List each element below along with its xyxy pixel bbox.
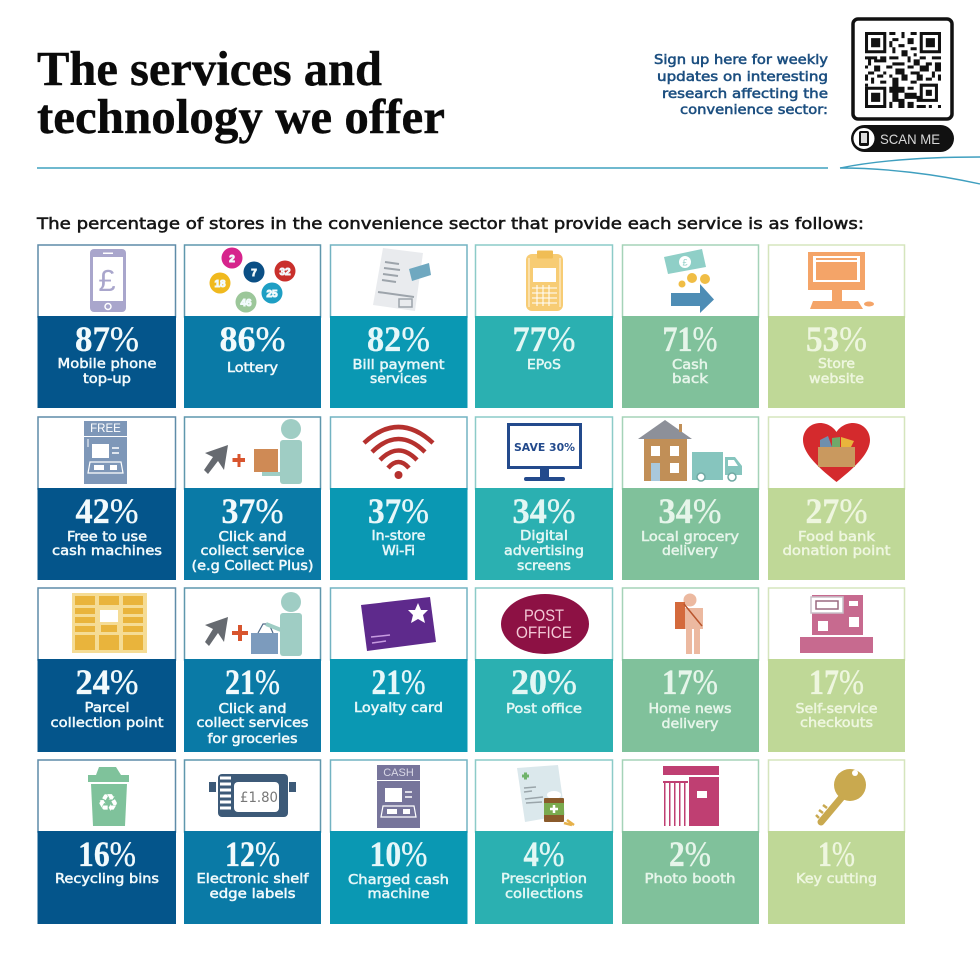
icon: post office sign xyxy=(501,594,589,654)
card: cash back xyxy=(622,245,759,408)
title: The services and xyxy=(37,41,382,96)
label: Mobile phone xyxy=(58,357,156,372)
label xyxy=(196,872,309,902)
label xyxy=(672,358,709,387)
label xyxy=(504,529,584,574)
icon: cash ATM xyxy=(377,765,420,828)
card: bill payment xyxy=(330,245,468,408)
value: 82% xyxy=(367,319,430,359)
card: click and collect groceries xyxy=(184,588,321,752)
label: advertising xyxy=(504,544,584,559)
icon: cash back: £ xyxy=(682,258,688,268)
value: 17% xyxy=(662,662,718,702)
label: edge labels xyxy=(210,887,296,902)
value: 77% xyxy=(512,319,576,359)
icon: key xyxy=(816,769,866,822)
label: Bill payment xyxy=(352,358,444,373)
value: 1% xyxy=(818,834,855,874)
icon: post office sign: OFFICE xyxy=(516,623,572,642)
label: Store xyxy=(818,357,855,372)
icon: monitor xyxy=(508,424,580,481)
swoosh xyxy=(840,157,980,184)
icon: house and van xyxy=(638,420,742,481)
card: home news delivery xyxy=(622,588,759,752)
card: post office xyxy=(475,588,613,752)
label: Click and xyxy=(218,530,286,545)
label: donation point xyxy=(782,544,890,559)
card: lottery xyxy=(184,245,321,408)
label: Wi-Fi xyxy=(382,544,415,559)
label: (e.g Collect Plus) xyxy=(192,559,314,574)
icon: news delivery person xyxy=(675,594,703,654)
card: charged cash machine xyxy=(330,760,468,924)
label: delivery xyxy=(662,717,719,732)
value: 27% xyxy=(806,491,868,531)
title xyxy=(37,41,445,144)
label: Click and xyxy=(218,702,286,717)
icon: free ATM: FREE xyxy=(90,423,121,435)
label xyxy=(782,530,890,559)
label xyxy=(52,530,162,559)
icon: loyalty card xyxy=(361,597,436,651)
icon: click and collect bag xyxy=(205,592,302,656)
label: Electronic shelf xyxy=(196,872,309,887)
label xyxy=(809,357,864,387)
card: key cutting xyxy=(768,760,905,924)
value: 53% xyxy=(806,319,867,359)
card: food bank xyxy=(768,417,905,580)
value: 17% xyxy=(809,662,864,702)
icon: computer xyxy=(808,252,874,309)
label: top-up xyxy=(83,372,131,387)
value: 21% xyxy=(225,662,280,702)
icon: lottery balls: 2 xyxy=(229,254,235,265)
icon: lottery balls: 7 xyxy=(251,268,257,279)
icon: lottery balls: 25 xyxy=(266,289,278,300)
label: Lottery xyxy=(227,361,278,376)
sign up text xyxy=(654,53,828,118)
label: Home news xyxy=(648,702,732,717)
label xyxy=(50,701,164,731)
sign up text: updates on interesting xyxy=(657,70,828,85)
label: Prescription xyxy=(501,872,587,887)
icon: prescription xyxy=(517,765,574,825)
QR code xyxy=(853,19,952,119)
label: Local grocery xyxy=(641,530,739,545)
card: mobile phone top-up xyxy=(38,245,176,408)
value: 37% xyxy=(222,491,284,531)
card: digital advertising xyxy=(475,417,613,580)
header rule xyxy=(37,167,828,169)
label: Recycling bins xyxy=(55,872,159,887)
card: EPoS xyxy=(475,245,613,408)
label: Key cutting xyxy=(796,872,877,887)
card: photo booth xyxy=(622,760,759,924)
card: wi-fi xyxy=(330,417,468,580)
card: store website xyxy=(768,245,905,408)
icon: lottery balls: 46 xyxy=(240,298,252,309)
label: services xyxy=(370,372,427,387)
card: free cash machines xyxy=(38,417,176,580)
icon: shelf label xyxy=(209,774,296,817)
value: 37% xyxy=(368,491,429,531)
icon: phone xyxy=(90,249,126,312)
label xyxy=(648,702,732,732)
icon: shelf label: £1.80 xyxy=(240,790,278,806)
value: 2% xyxy=(669,834,711,874)
label: Charged cash xyxy=(348,873,449,888)
card: prescription collections xyxy=(475,760,613,924)
icon: recycling bin: ♻ xyxy=(97,789,119,817)
label: back xyxy=(672,372,709,387)
value: 34% xyxy=(658,491,722,531)
icon: recycling bin xyxy=(88,767,129,826)
card: loyalty card xyxy=(330,588,468,752)
icon: self checkout xyxy=(800,595,873,653)
label: Food bank xyxy=(798,530,876,545)
label: collections xyxy=(505,887,583,902)
card: local grocery delivery xyxy=(622,417,759,580)
value: 12% xyxy=(225,834,280,874)
label: Photo booth xyxy=(644,872,736,887)
label: collection point xyxy=(50,716,164,731)
label xyxy=(372,529,426,559)
label xyxy=(796,702,878,731)
label xyxy=(196,702,309,747)
icon: photo booth xyxy=(663,766,719,826)
card: electronic shelf labels xyxy=(184,760,321,924)
card: click and collect xyxy=(184,417,321,580)
value: 87% xyxy=(75,319,139,359)
label: checkouts xyxy=(800,716,873,731)
label: EPoS xyxy=(527,358,561,373)
subtitle: The percentage of stores in the convenience sector that provide each service is as follows: xyxy=(36,214,864,233)
value: 16% xyxy=(78,834,136,874)
sign up text: Sign up here for weekly xyxy=(654,53,828,68)
value: 24% xyxy=(76,662,138,702)
icon: parcel lockers xyxy=(72,593,147,653)
label: Loyalty card xyxy=(354,701,443,716)
scan me badge: SCAN ME xyxy=(880,131,940,147)
label xyxy=(348,873,449,902)
icon: phone: £ xyxy=(98,263,116,298)
label: collect service xyxy=(200,544,304,559)
title: technology we offer xyxy=(37,89,445,144)
icon: card terminal xyxy=(526,250,563,311)
icon: click and collect parcel xyxy=(204,419,302,484)
label: for groceries xyxy=(208,732,298,747)
label: delivery xyxy=(662,544,718,559)
value: 71% xyxy=(662,319,718,359)
value: 42% xyxy=(76,491,138,531)
value: 86% xyxy=(220,319,286,359)
sign up text: research affecting the xyxy=(662,87,828,102)
label: collect services xyxy=(196,716,309,731)
icon: lottery balls: 32 xyxy=(279,267,291,278)
label: screens xyxy=(517,559,571,574)
icon: lottery balls xyxy=(210,248,296,312)
value: 4% xyxy=(524,834,564,874)
label: Free to use xyxy=(67,530,147,545)
icon: cash ATM: CASH xyxy=(383,767,414,779)
icon: lottery balls: 18 xyxy=(214,279,226,290)
label: Post office xyxy=(506,702,582,717)
label: Cash xyxy=(672,358,708,373)
label xyxy=(501,872,587,902)
value: 10% xyxy=(370,834,428,874)
label: machine xyxy=(368,887,430,902)
value: 34% xyxy=(512,491,576,531)
scan me badge xyxy=(851,125,954,152)
value: 20% xyxy=(511,662,577,702)
card: parcel collection xyxy=(38,588,176,752)
label: Parcel xyxy=(84,701,130,716)
icon: post office sign: POST xyxy=(524,606,564,625)
label xyxy=(192,530,314,574)
label xyxy=(58,357,156,387)
card: self-service checkouts xyxy=(768,588,905,752)
label: cash machines xyxy=(52,544,162,559)
label: website xyxy=(809,372,864,387)
icon: free ATM xyxy=(84,421,127,484)
icon: cash back xyxy=(664,249,714,313)
label: In-store xyxy=(372,529,426,544)
icon: bill xyxy=(373,248,431,311)
icon: monitor: SAVE 30% xyxy=(514,441,575,454)
value: 21% xyxy=(372,662,426,702)
icon: heart with food box xyxy=(803,423,870,482)
label xyxy=(641,530,739,559)
label: Self-service xyxy=(796,702,878,717)
sign up text: convenience sector: xyxy=(680,103,828,118)
label xyxy=(352,358,444,387)
card: recycling bins xyxy=(38,760,176,924)
icon: wifi xyxy=(364,427,433,479)
label: Digital xyxy=(520,529,568,544)
